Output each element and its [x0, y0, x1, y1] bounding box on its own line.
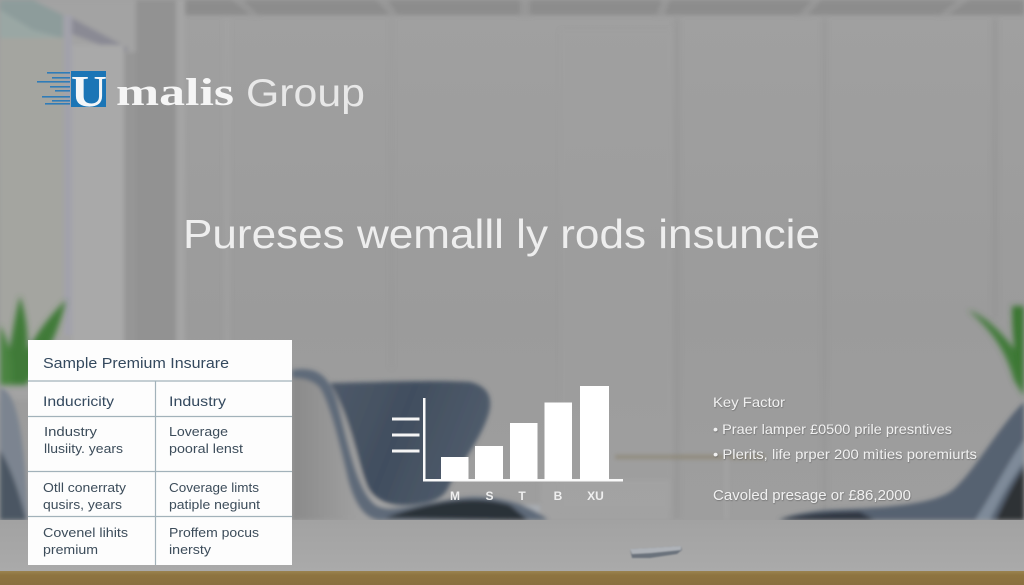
- table row 1: pooral lenst: [169, 441, 243, 456]
- table row 1: llusiity. years: [44, 441, 124, 456]
- logo: Umalis Group: [37, 67, 365, 116]
- axis ticks: [392, 418, 420, 452]
- summary line: Cavoled presage or £86,2000: [713, 488, 911, 504]
- table row 2: Coverage limts: [169, 480, 260, 495]
- table header row: Industry: [169, 393, 226, 409]
- table row 3: inersty: [169, 542, 212, 557]
- bar labels: M: [450, 489, 460, 503]
- bar labels: [450, 489, 604, 503]
- axes: [423, 398, 623, 482]
- bar chart: [392, 386, 623, 503]
- table row 3: Covenel lihits: [43, 525, 129, 540]
- desk: [0, 520, 1024, 572]
- bar labels: T: [518, 489, 526, 503]
- table row 3: Proffem pocus: [169, 525, 260, 540]
- bullet 1: • Praer lamper £0500 prile presntives: [713, 421, 952, 437]
- table row 2: Otll conerraty: [43, 480, 127, 495]
- table row 1: Loverage: [169, 424, 228, 439]
- key factor heading: Key Factor: [713, 394, 785, 410]
- table title: Sample Premium Insurare: [43, 355, 229, 372]
- table row 2: qusirs, years: [43, 497, 123, 512]
- table row 1: Industry: [44, 424, 98, 439]
- left chair: [0, 369, 548, 520]
- table row 2: [43, 480, 260, 512]
- table row 3: premium: [43, 542, 98, 557]
- icon: speed lines: [37, 72, 70, 105]
- table row 3: [43, 525, 260, 557]
- panel: sample premium table: [28, 340, 292, 565]
- bar labels: B: [554, 489, 563, 503]
- phone on desk: [630, 546, 682, 558]
- plants: [0, 296, 1024, 396]
- bars: [441, 386, 609, 480]
- table row 1: [44, 424, 243, 456]
- table header row: [43, 393, 226, 409]
- logo word: Group: Group: [246, 72, 365, 115]
- bar labels: XU: [587, 489, 604, 503]
- icon: blue U block: U: [71, 67, 107, 116]
- logo word: malis: malis: [116, 71, 234, 114]
- bullet 2: • Plerits, life prper 200 mìties poremiurts: [713, 446, 977, 462]
- bar labels: S: [485, 489, 494, 503]
- title: Pureses wemalll ly rods insuncie: [183, 211, 820, 257]
- right chair: [778, 402, 1024, 520]
- table header row: Inducricity: [43, 393, 114, 409]
- table row 2: patiple negiunt: [169, 497, 260, 512]
- key factor text block: [713, 394, 977, 504]
